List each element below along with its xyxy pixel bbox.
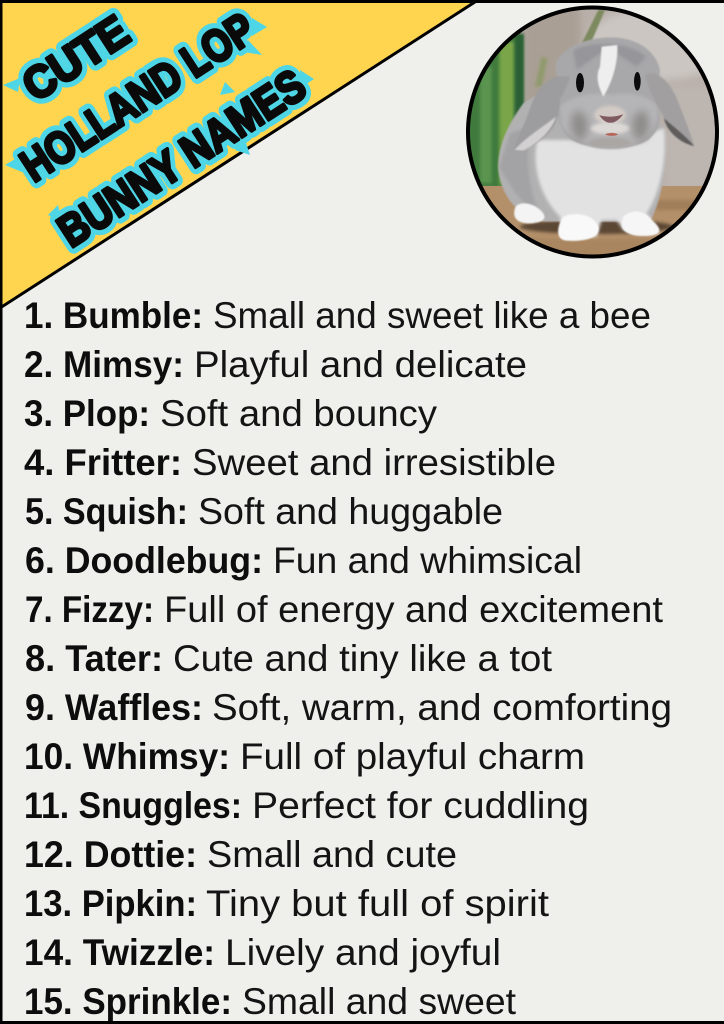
yellow corner banner <box>0 0 478 308</box>
name 4: 4. Fritter: <box>24 442 182 483</box>
name 1: 1. Bumble: <box>24 295 203 336</box>
rabbit body <box>497 96 663 222</box>
name 2 <box>24 344 527 385</box>
name 5 <box>25 491 503 532</box>
name 7: 7. Fizzy: <box>25 589 154 630</box>
name 12: Small and cute <box>207 834 457 875</box>
left ear <box>522 77 569 145</box>
right ear <box>645 74 694 146</box>
name 11: Perfect for cuddling <box>252 785 589 826</box>
rabbit head <box>555 37 660 149</box>
name 8 <box>25 638 553 679</box>
names list <box>24 295 672 1022</box>
circular rabbit photo <box>460 0 724 264</box>
name 13: Tiny but full of spirit <box>206 883 550 924</box>
name 12: 12. Dottie: <box>24 834 197 875</box>
name 9: Soft, warm, and comforting <box>212 687 672 728</box>
name 8: 8. Tater: <box>25 638 163 679</box>
name 8: Cute and tiny like a tot <box>173 638 553 679</box>
name 14 <box>24 932 501 973</box>
name 1: Small and sweet like a bee <box>213 295 651 336</box>
name 2: Playful and delicate <box>194 344 527 385</box>
name 14: 14. Twizzle: <box>24 932 215 973</box>
white blaze <box>598 45 617 97</box>
rabbit feet <box>514 203 544 223</box>
rabbit shadow <box>520 219 673 234</box>
name 15: 15. Sprinkle: <box>24 981 232 1022</box>
muzzle <box>594 106 626 124</box>
name 6: 6. Doodlebug: <box>25 540 263 581</box>
name 3: Soft and bouncy <box>160 393 438 434</box>
name 7: Full of energy and excitement <box>164 589 664 630</box>
name 14: Lively and joyful <box>225 932 501 973</box>
name 9: 9. Waffles: <box>25 687 203 728</box>
name 3 <box>24 393 438 434</box>
name 2: 2. Mimsy: <box>24 344 184 385</box>
name 4: Sweet and irresistible <box>192 442 556 483</box>
name 13 <box>24 883 550 924</box>
name 15: Small and sweet <box>242 981 517 1022</box>
name 5: Soft and huggable <box>198 491 503 532</box>
name 5: 5. Squish: <box>25 491 188 532</box>
name 11 <box>24 785 589 826</box>
title spikes <box>3 18 314 222</box>
photo ring <box>468 8 717 256</box>
rabbit eyes <box>576 73 584 92</box>
name 10: Full of playful charm <box>240 736 585 777</box>
name 6: Fun and whimsical <box>273 540 582 581</box>
name 3: 3. Plop: <box>24 393 150 434</box>
name 13: 13. Pipkin: <box>24 883 197 924</box>
name 12 <box>24 834 457 875</box>
name 6 <box>25 540 582 581</box>
name 1 <box>24 295 651 336</box>
name 9 <box>25 687 672 728</box>
nose and mouth <box>599 114 623 123</box>
name 4 <box>24 442 556 483</box>
title line: Cute: CUTE <box>13 5 138 111</box>
name 15 <box>24 981 517 1022</box>
name 11: 11. Snuggles: <box>24 785 242 826</box>
title line: Bunny Names: BUNNY NAMES <box>49 59 315 257</box>
name 10: 10. Whimsy: <box>24 736 230 777</box>
title line: Bunny Names: BUNNY NAMES <box>49 59 315 257</box>
name 10 <box>24 736 585 777</box>
title <box>3 3 315 257</box>
title line: Cute: CUTE <box>13 5 138 111</box>
